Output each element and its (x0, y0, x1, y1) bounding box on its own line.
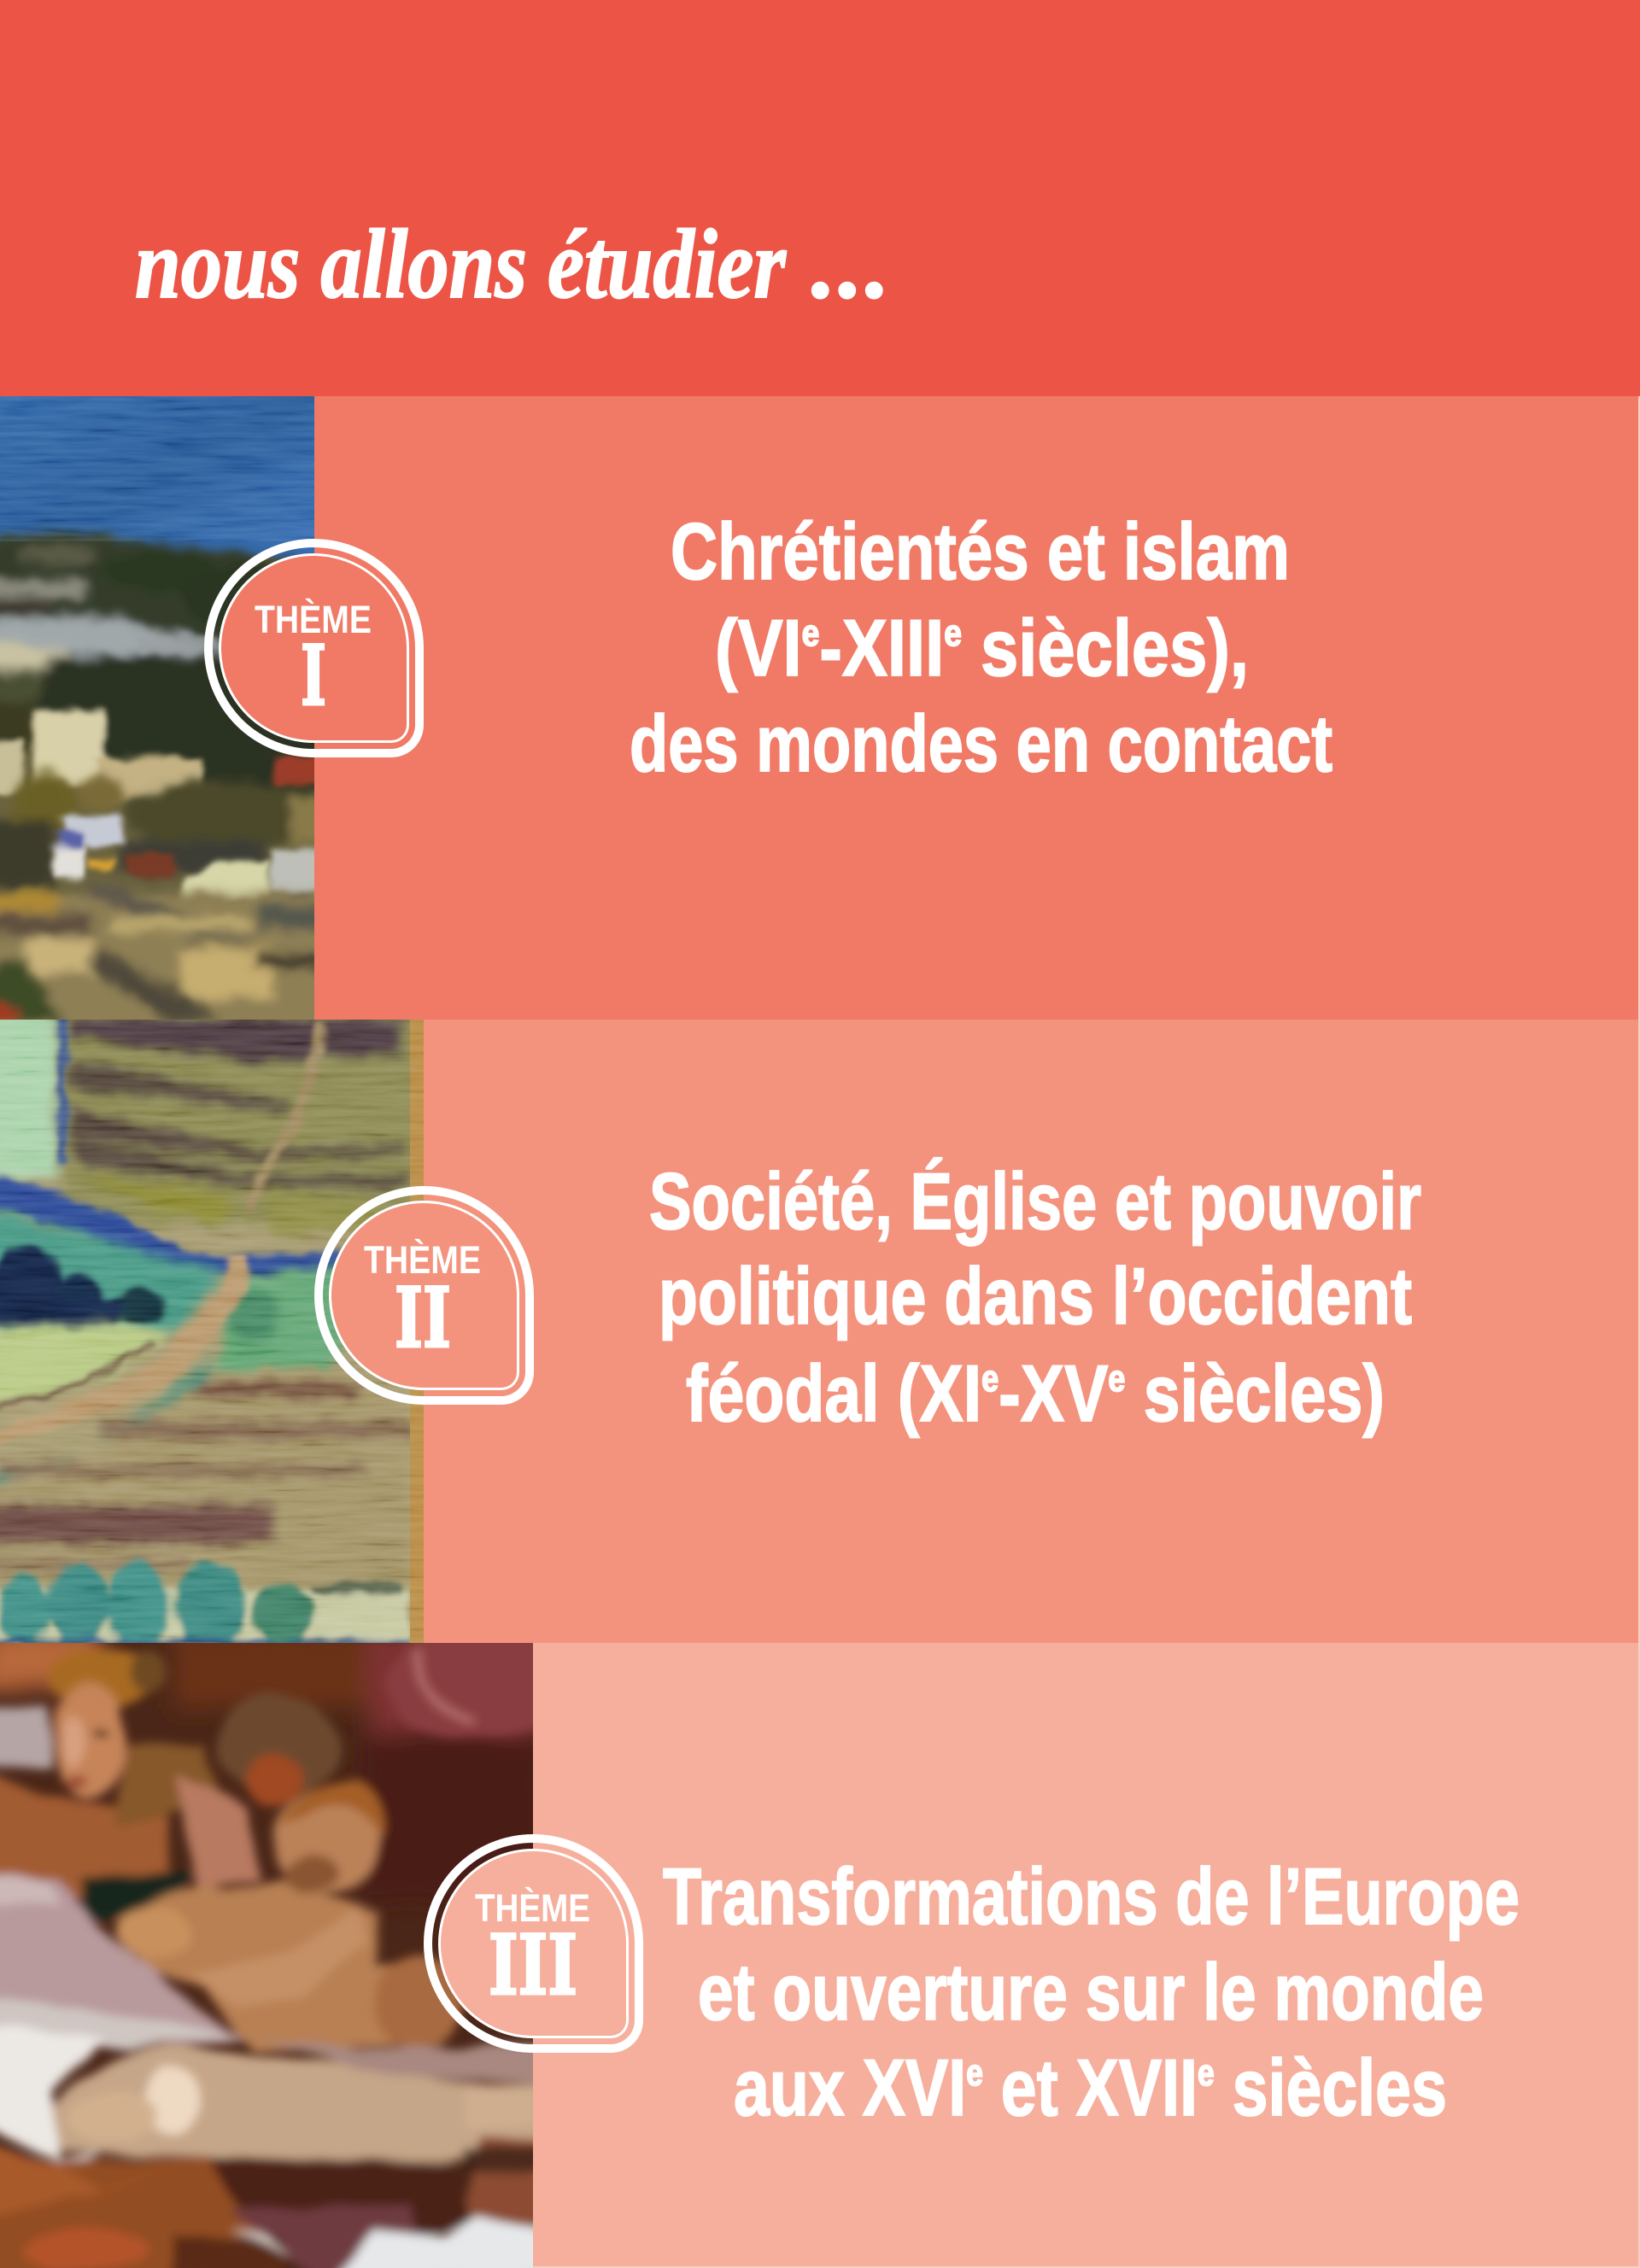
heading: theme I (630, 506, 1332, 788)
panel: theme III background (533, 1643, 1640, 2268)
heading: theme I: e (944, 612, 962, 654)
heading: theme I: Chrétientés et islam (671, 506, 1290, 596)
title: nous allons étudier (135, 210, 787, 319)
page edge highlight (533, 396, 1640, 2268)
badge: theme II: THÈME (364, 1238, 481, 1282)
badge: theme III: III (489, 1917, 577, 2014)
heading: theme I: siècles), (962, 603, 1249, 693)
photo: fortress by the sea (0, 396, 314, 1020)
heading: theme III (663, 1851, 1520, 2132)
heading: theme II: e (1108, 1358, 1125, 1400)
badge: theme II (314, 1186, 534, 1405)
badge: theme III (424, 1834, 643, 2053)
heading: theme III: e (1198, 2052, 1215, 2094)
heading: theme II: Société, Église et pouvoir (649, 1156, 1421, 1246)
heading: theme II: siècles) (1125, 1348, 1385, 1438)
badge: theme I (204, 539, 424, 757)
badge: theme I: THÈME (255, 598, 372, 641)
heading: theme III: aux XVI (734, 2043, 1024, 2132)
badge: theme I: I (301, 628, 326, 724)
photo: medieval painted landscape (0, 1020, 424, 1643)
heading: theme III: siècles (1215, 2043, 1447, 2132)
title: ... (811, 210, 890, 319)
badge: theme III: THÈME (475, 1886, 590, 1930)
badge: theme II: II (395, 1270, 451, 1366)
header band (0, 0, 1640, 397)
panel: theme I background (314, 396, 1640, 1020)
photo: Sistine Chapel fresco detail (0, 1643, 533, 2268)
heading: theme II: féodal (XI (686, 1348, 1047, 1438)
heading: theme II (649, 1156, 1421, 1438)
heading: theme II: politique dans l’occident (659, 1251, 1412, 1341)
heading: theme II: e (981, 1358, 999, 1400)
heading: theme I: -XIII (819, 603, 944, 693)
heading: theme II: -XV (999, 1348, 1109, 1438)
heading: theme I: des mondes en contact (630, 699, 1332, 788)
heading: theme I: e (802, 612, 819, 654)
panel: theme II background (424, 1020, 1640, 1644)
heading: theme III: et XVII (983, 2043, 1198, 2132)
heading: theme I: (VI (715, 603, 817, 693)
heading: theme III: e (966, 2052, 983, 2094)
